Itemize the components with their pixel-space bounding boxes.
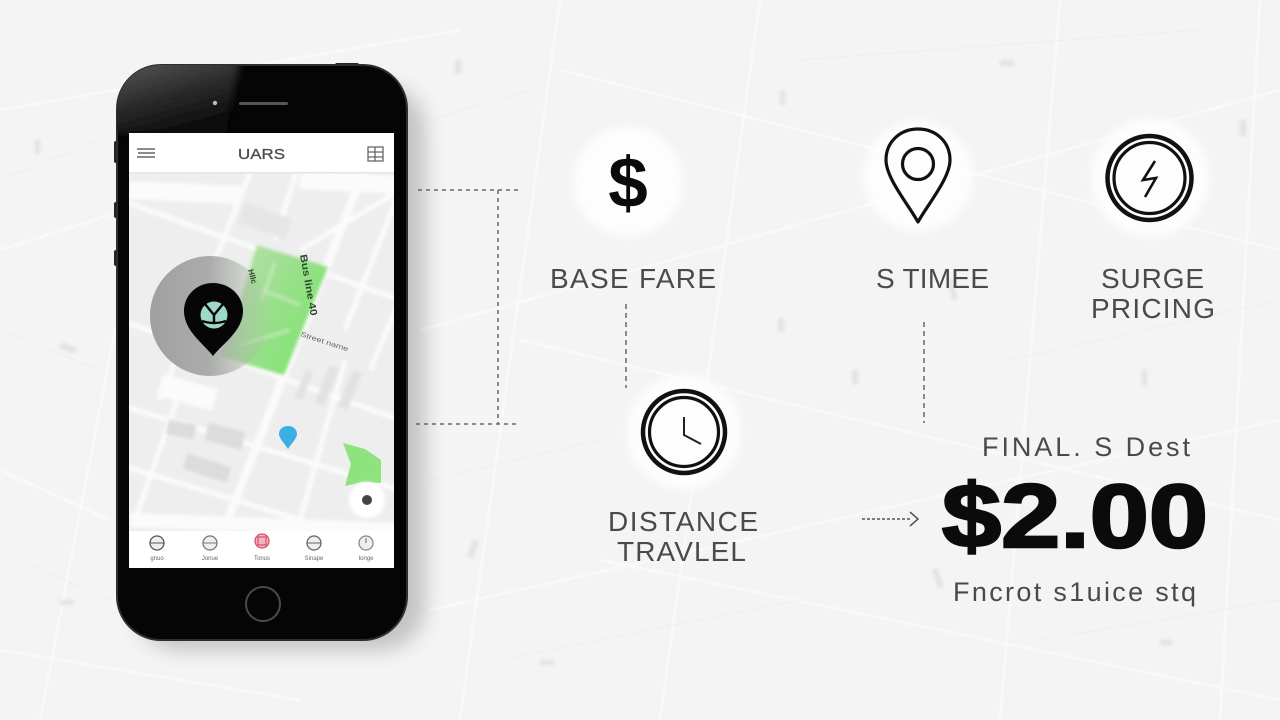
item: time [863, 121, 989, 294]
search radius halo [150, 256, 270, 376]
icon: dollar [573, 127, 683, 237]
tab: item 3 active: Tonus [254, 556, 270, 562]
tab: item 5: Ionge [358, 556, 374, 562]
label: surge pricing: PRICING [1091, 293, 1215, 324]
label: surge pricing [1091, 263, 1215, 324]
tab: item 2: Jonue [202, 556, 219, 562]
app header [129, 133, 394, 174]
park labels: Hllc [246, 268, 259, 285]
park labels: Bus line 40 [297, 254, 319, 317]
park paths [240, 262, 300, 345]
blue location pin [279, 426, 297, 449]
tab: item 1: gnuo [150, 556, 164, 562]
item: distance travel [608, 375, 758, 567]
item: base fare [550, 127, 716, 294]
tab: item 4 [305, 536, 324, 562]
phone shadow [135, 85, 425, 650]
screen [129, 133, 394, 568]
calendar icon [368, 147, 383, 161]
menu icon [137, 149, 155, 157]
dashed connector: phone bracket [416, 190, 520, 424]
dashed connector: base fare to distance [625, 304, 627, 388]
park: small green area [343, 443, 381, 486]
glass reflection [110, 60, 240, 133]
icon: map pin [863, 121, 973, 231]
label: base fare: BASE FARE [550, 263, 716, 294]
side buttons [114, 63, 359, 266]
item: surge pricing [1091, 119, 1215, 324]
tab: item 5 [358, 536, 374, 562]
label: time: S TIMEE [876, 263, 989, 294]
tab: item 3 active [254, 534, 270, 562]
phone body [117, 65, 407, 640]
label: distance travel: TRAVLEL [617, 536, 746, 567]
final cost amount: $2.00 [942, 467, 1208, 567]
label: distance travel [608, 506, 758, 567]
camera and speaker [213, 101, 288, 105]
arrow to final cost [862, 512, 918, 526]
current location button [349, 482, 385, 518]
icon: clock [627, 375, 741, 489]
location marker [184, 283, 243, 356]
final cost block [942, 432, 1208, 607]
map [129, 174, 394, 531]
icon: lightning ring [1091, 119, 1209, 237]
park labels [246, 254, 349, 353]
label: distance travel: DISTANCE [608, 506, 758, 537]
tab: item 2 [202, 536, 219, 562]
bottom tab bar [129, 531, 394, 568]
marker emblem [200, 302, 228, 328]
tab: item 1 [150, 536, 164, 562]
tab: item 4: Sinape [305, 556, 324, 562]
park: green area [218, 245, 328, 375]
label: surge pricing: SURGE [1101, 263, 1204, 294]
map blocks [166, 202, 362, 483]
park labels: Street name [299, 331, 349, 353]
header title: UARS [238, 146, 285, 163]
final cost note: Fncrot s1uice stq [953, 577, 1196, 607]
infographic canvas [35, 60, 1246, 665]
final cost heading: FINAL. S Dest [982, 432, 1190, 462]
home button [246, 587, 280, 621]
dashed connector: time to final cost [923, 322, 925, 423]
map roads [129, 174, 394, 531]
phone [110, 60, 425, 650]
icon: dollar: $ [608, 144, 648, 223]
